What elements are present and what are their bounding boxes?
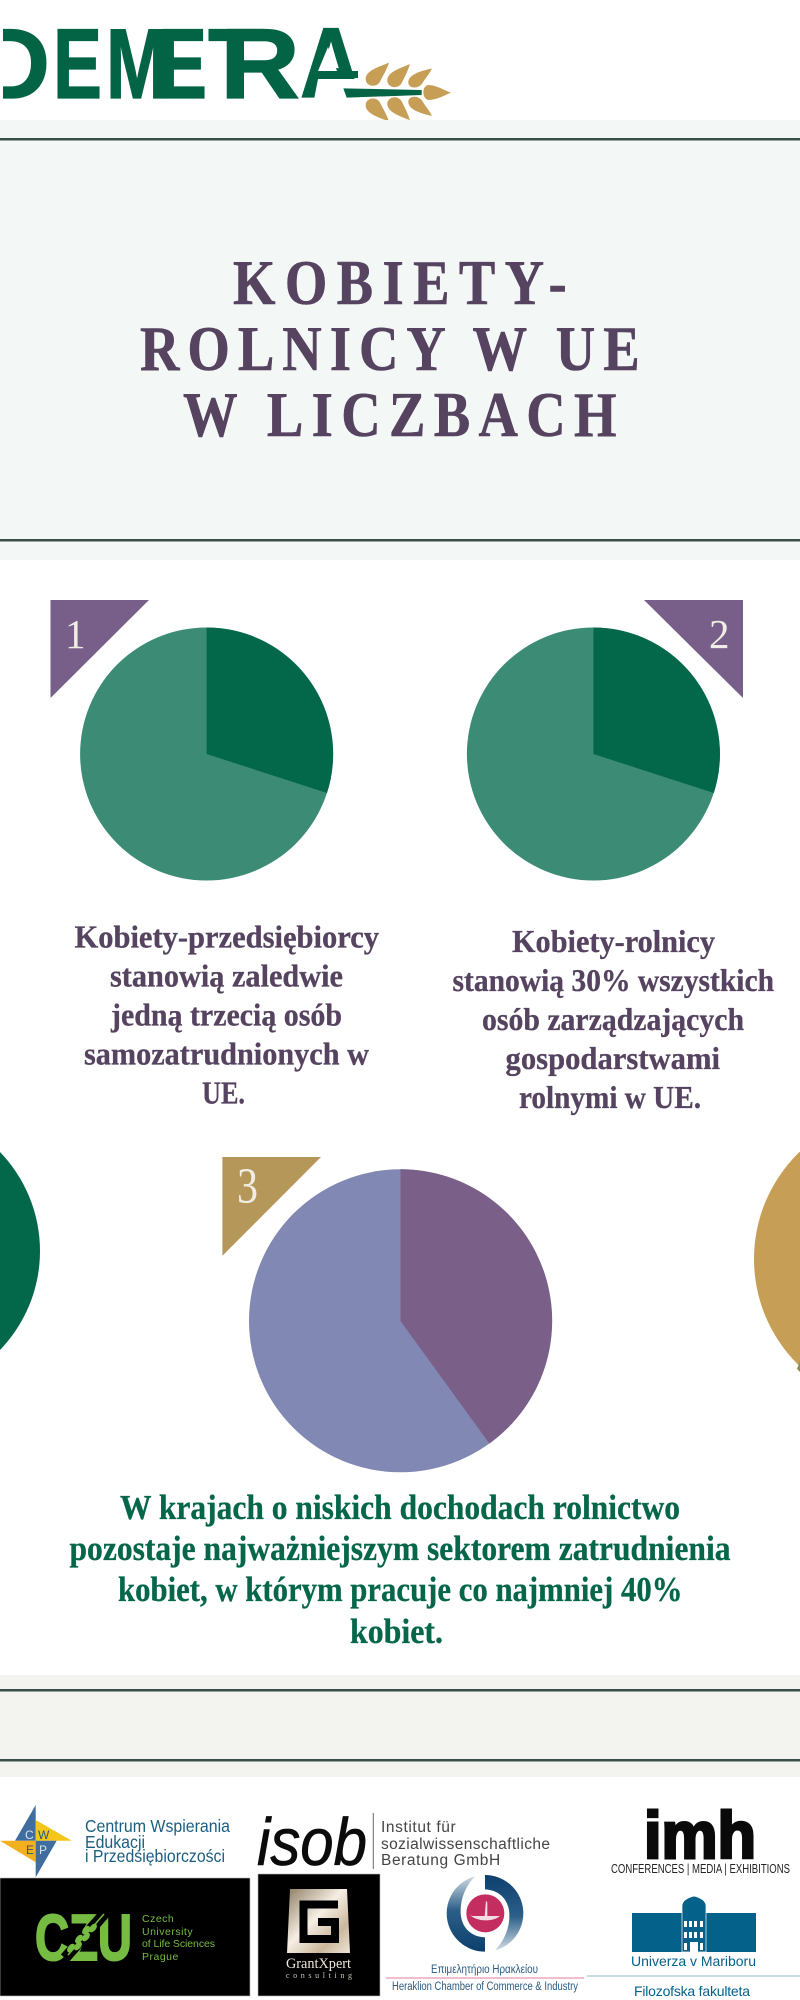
badge: number 3 [222,1157,321,1256]
decorative circle: green left [0,1108,40,1394]
logo: CWEP [0,1805,230,1877]
title text: KOBIETY- [233,247,567,318]
logo: Czech University of Life Sciences: of Life Sciences [142,1938,215,1950]
logo: isob: sozialwissenschaftliche [381,1836,550,1853]
badge: number 1 [50,600,149,698]
text block: fact 2: rolnymi w UE. [519,1080,701,1115]
text block: fact 2: stanowią 30% wszystkich [452,963,774,998]
panel: footer band [0,1675,800,1777]
logo: Czech University of Life Sciences: CZU [35,1901,132,1974]
text block: fact 3 [70,1489,730,1651]
logo: CWEP: E [26,1843,34,1857]
text block: fact 3: W krajach o niskich dochodach rolnictwo [120,1489,680,1527]
text block: fact 1: jedną trzecią osób [110,998,342,1032]
title text: W LICZBACH [183,379,616,450]
logo: CWEP: i Przedsiębiorczości [85,1846,225,1866]
badge: number 1: 1 [65,611,86,657]
logo: Czech University of Life Sciences: University [142,1926,193,1938]
logo: Demetra: R [220,8,300,119]
logo: University of Maribor [587,1896,800,1999]
logo: imh [611,1798,790,1876]
badge: number 3: 3 [237,1159,258,1215]
title text [140,247,640,450]
badge: number 2: 2 [709,611,730,657]
pie chart 2 [467,628,720,880]
text block: fact 2: osób zarządzających [482,1002,744,1037]
pie chart 3 [249,1169,552,1472]
text block: fact 1: UE. [202,1076,245,1110]
logo: CWEP: P [39,1843,47,1857]
text block: fact 1: Kobiety-przedsiębiorcy [74,920,379,954]
text block: fact 2 [452,924,774,1115]
text block: fact 2: gospodarstwami [506,1041,720,1076]
logo: GrantXpert: consulting [286,1971,352,1980]
logo: Demetra: T [208,8,264,119]
logo: Heraklion Chamber of Commerce [386,1875,584,1993]
logo: CWEP: W [38,1828,50,1842]
logo: isob: Institut für [381,1819,456,1836]
logo: isob [257,1805,550,1880]
logo: Czech University of Life Sciences [0,1878,250,1996]
logo: Heraklion Chamber of Commerce: Επιμελητήριο Ηρακλείου [431,1964,538,1976]
decorative circle: gold right [754,1110,800,1408]
text block: fact 1: samozatrudnionych w [84,1036,369,1072]
logo: Demetra [3,28,451,120]
logo: University of Maribor: Univerza v Mariboru [631,1953,756,1969]
panel: title [0,120,800,560]
logo: GrantXpert: GrantXpert [286,1956,352,1972]
logo: Heraklion Chamber of Commerce: Heraklion Chamber of Commerce & Industry [392,1981,578,1993]
text block: fact 3: kobiet. [350,1613,443,1651]
text block: fact 2: Kobiety-rolnicy [512,924,715,959]
text block: fact 1 [74,920,379,1110]
logo: imh: imh [644,1798,756,1872]
logo: Czech University of Life Sciences: Prague [142,1951,179,1963]
text block: fact 3: kobiet, w którym pracuje co najmniej 40% [118,1571,682,1609]
text block: fact 3: pozostaje najważniejszym sektorem zatrudnienia [70,1530,730,1568]
logo: isob: Beratung GmbH [381,1852,501,1869]
logo: Czech University of Life Sciences: Czech [142,1913,174,1925]
pie chart 1 [80,628,333,880]
badge: number 2 [644,600,743,698]
logo: Demetra: E [53,8,102,119]
logo: CWEP: C [25,1828,34,1842]
logo: CWEP: Centrum Wspierania [85,1816,230,1836]
logo: CWEP: Edukacji [85,1832,145,1852]
logo: Demetra: A [300,7,362,118]
logo: GrantXpert [258,1874,380,1996]
title text: ROLNICY W UE [140,313,640,384]
logo: University of Maribor: Filozofska fakulteta [634,1983,750,1999]
text block: fact 1: stanowią zaledwie [110,958,343,994]
logo: isob: isob [257,1805,367,1880]
logo: Demetra: E [158,8,207,119]
logo: Demetra: M [106,8,168,119]
